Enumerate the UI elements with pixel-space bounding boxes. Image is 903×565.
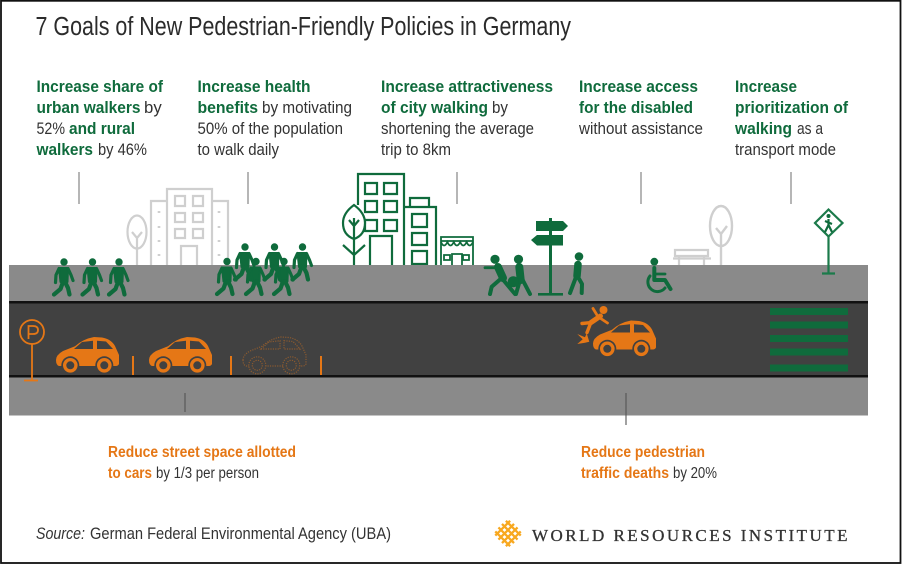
removed car outline [243, 337, 306, 374]
walker group [217, 243, 312, 294]
grey bench [673, 250, 711, 265]
car 2 [149, 337, 212, 374]
goal 1 text: Increase share of [36, 77, 163, 96]
goal 2 text: by motivating [262, 98, 352, 117]
reduce street space text: by 1/3 per person [156, 465, 259, 482]
parking bay markers [133, 356, 321, 375]
green tree [343, 205, 365, 265]
impact burst [577, 333, 589, 344]
goal 2 text: Increase health [198, 77, 310, 96]
goal 3 text: of city walking [381, 98, 488, 117]
goal 3 text [381, 77, 553, 159]
goal 5 text: prioritization of [735, 98, 848, 117]
crosswalk [770, 308, 848, 372]
goal 3 text: shortening the average [381, 119, 534, 138]
goal 1 text: walkers [36, 140, 93, 159]
upper sidewalk [9, 265, 868, 301]
road [9, 301, 868, 378]
goal 1 text: 52% [36, 119, 65, 138]
goal 1 text: by 46% [98, 140, 147, 159]
reduce deaths text: traffic deaths [581, 465, 669, 482]
title: 7 Goals of New Pedestrian-Friendly Policies in Germany [36, 13, 571, 41]
pedestrian crossing sign [815, 210, 842, 274]
reduce street space text [108, 444, 296, 482]
goal 5 text: transport mode [735, 140, 836, 159]
reduce deaths text: Reduce pedestrian [581, 444, 705, 461]
reduce street space text: Reduce street space allotted [108, 444, 296, 461]
goal 3 text: trip to 8km [381, 140, 451, 159]
goal 4 text: Increase access [579, 77, 698, 96]
goal 2 text: benefits [198, 98, 258, 117]
grey tree left [128, 216, 146, 265]
parking sign [20, 320, 44, 380]
green shop [441, 237, 473, 265]
goal 1 text: and rural [69, 119, 135, 138]
goal 5 text: walking [734, 119, 792, 138]
reduce deaths text: by 20% [673, 465, 717, 482]
people helping walkers [485, 252, 583, 294]
grey tree right [710, 206, 732, 265]
goal 2 text [198, 77, 352, 159]
goal 3 text: Increase attractiveness [381, 77, 553, 96]
reduce deaths text [581, 444, 717, 482]
goal 1 text [36, 77, 163, 159]
source line: German Federal Environmental Agency (UBA) [90, 524, 391, 543]
leader lines [79, 172, 791, 204]
goal 3 text: by [492, 98, 508, 117]
green buildings [358, 174, 436, 265]
wheelchair icon [648, 258, 670, 292]
crash car [593, 320, 656, 358]
reduce street space text: to cars [108, 465, 152, 482]
goal 4 text: for the disabled [579, 98, 693, 117]
goal 4 text [578, 77, 703, 138]
goal 1 text: by [144, 98, 162, 117]
WRI logo [492, 518, 524, 549]
goal 2 text: to walk daily [198, 140, 279, 159]
lower sidewalk [9, 378, 868, 416]
goal 2 text: 50% of the population [198, 119, 343, 138]
source line: Source: [36, 524, 85, 543]
grey background building [151, 189, 228, 265]
WRI name: WORLD RESOURCES INSTITUTE [532, 526, 848, 545]
goal 4 text: without assistance [578, 119, 703, 138]
three walkers [54, 258, 128, 294]
goal 5 text: Increase [735, 77, 797, 96]
direction sign [531, 218, 568, 296]
goal 5 text: as a [797, 119, 823, 138]
goal 5 text [734, 77, 848, 159]
goal 1 text: urban walkers [36, 98, 140, 117]
car 1 [56, 337, 119, 374]
struck pedestrian [582, 306, 608, 332]
leader lines over sidewalk [185, 393, 626, 425]
